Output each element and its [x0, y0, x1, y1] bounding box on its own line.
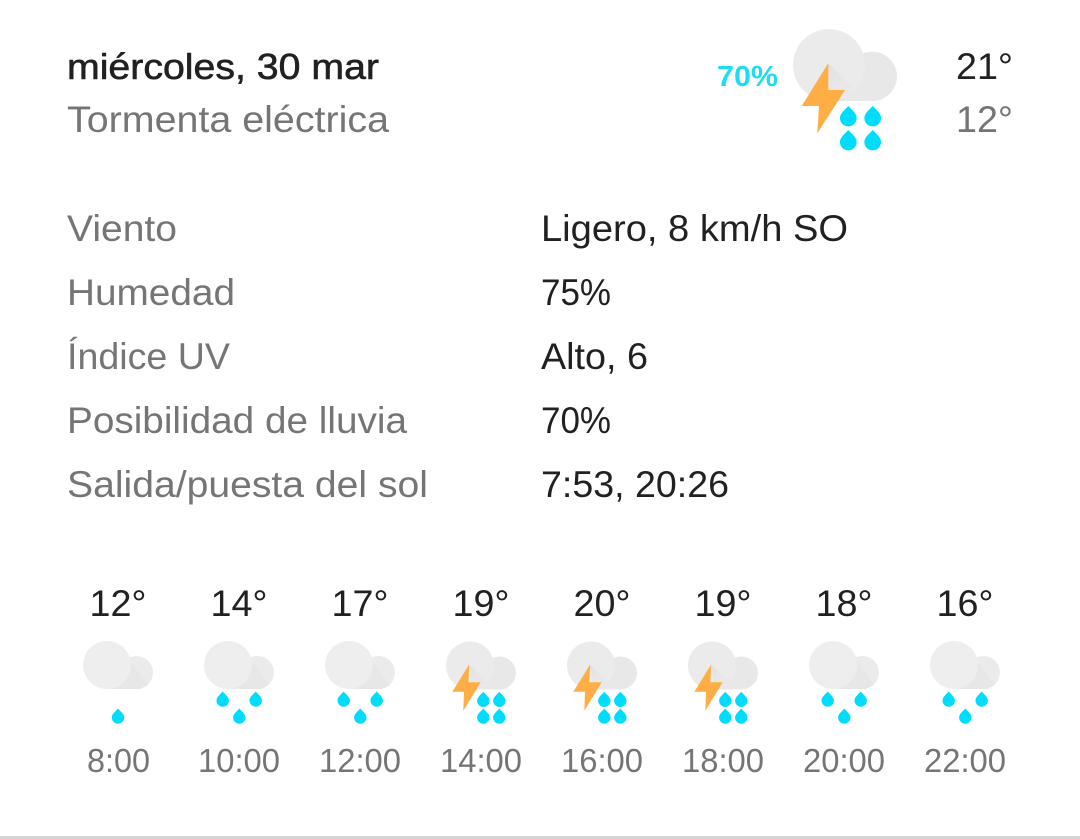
hour 20:00: 18°	[816, 583, 872, 624]
row: posibilidad de lluvia	[67, 400, 611, 441]
hour 20:00	[803, 583, 885, 779]
row: humedad: 75%	[541, 272, 611, 313]
row: salida/puesta del sol: Salida/puesta del sol	[67, 464, 428, 505]
bottom divider bar	[0, 836, 1080, 839]
row: posibilidad de lluvia: Posibilidad de lluvia	[67, 400, 407, 441]
date heading: miércoles, 30 mar	[67, 46, 379, 87]
hour 22:00	[924, 583, 1006, 779]
row: indice UV: Alto, 6	[541, 336, 648, 377]
row: viento	[67, 208, 848, 249]
icon: main storm cloud	[793, 29, 897, 150]
hour 8:00: 12°	[90, 583, 146, 624]
hour 8:00: 8:00	[87, 742, 150, 779]
hour 14:00	[440, 583, 522, 779]
row: posibilidad de lluvia: 70%	[541, 400, 611, 441]
details table	[67, 208, 848, 505]
hour 12:00	[319, 583, 401, 779]
hourly forecast	[83, 583, 1006, 779]
hour 22:00: 22:00	[924, 742, 1006, 779]
hour 16:00: 16:00	[561, 742, 643, 779]
hour 10:00	[198, 583, 280, 779]
hour 8:00	[83, 583, 153, 779]
hour 16:00: 20°	[574, 583, 630, 624]
hour 10:00: 14°	[210, 583, 268, 624]
hour 18:00: 18:00	[682, 742, 764, 779]
hour 16:00	[561, 583, 643, 779]
low temperature: 12°	[956, 99, 1013, 140]
hour 12:00: 17°	[332, 583, 388, 624]
row: indice UV	[67, 336, 648, 377]
hour 14:00: 19°	[452, 583, 510, 624]
hour 20:00: 20:00	[803, 742, 885, 779]
row: humedad	[67, 272, 611, 313]
hour 10:00: 10:00	[198, 742, 280, 779]
row: humedad: Humedad	[67, 272, 235, 313]
hour 12:00: 12:00	[319, 742, 401, 779]
row: viento: Ligero, 8 km/h SO	[541, 208, 848, 249]
weather condition: Tormenta eléctrica	[67, 99, 389, 140]
rain chance badge: 70%	[717, 61, 778, 93]
hour 14:00: 14:00	[440, 742, 522, 779]
hour 18:00: 19°	[694, 583, 752, 624]
row: salida/puesta del sol	[67, 464, 729, 505]
row: indice UV: Índice UV	[67, 336, 230, 377]
hour 18:00	[682, 583, 764, 779]
high temperature: 21°	[956, 46, 1013, 87]
hour 22:00: 16°	[936, 583, 994, 624]
row: viento: Viento	[67, 208, 177, 249]
row: salida/puesta del sol: 7:53, 20:26	[541, 464, 729, 505]
